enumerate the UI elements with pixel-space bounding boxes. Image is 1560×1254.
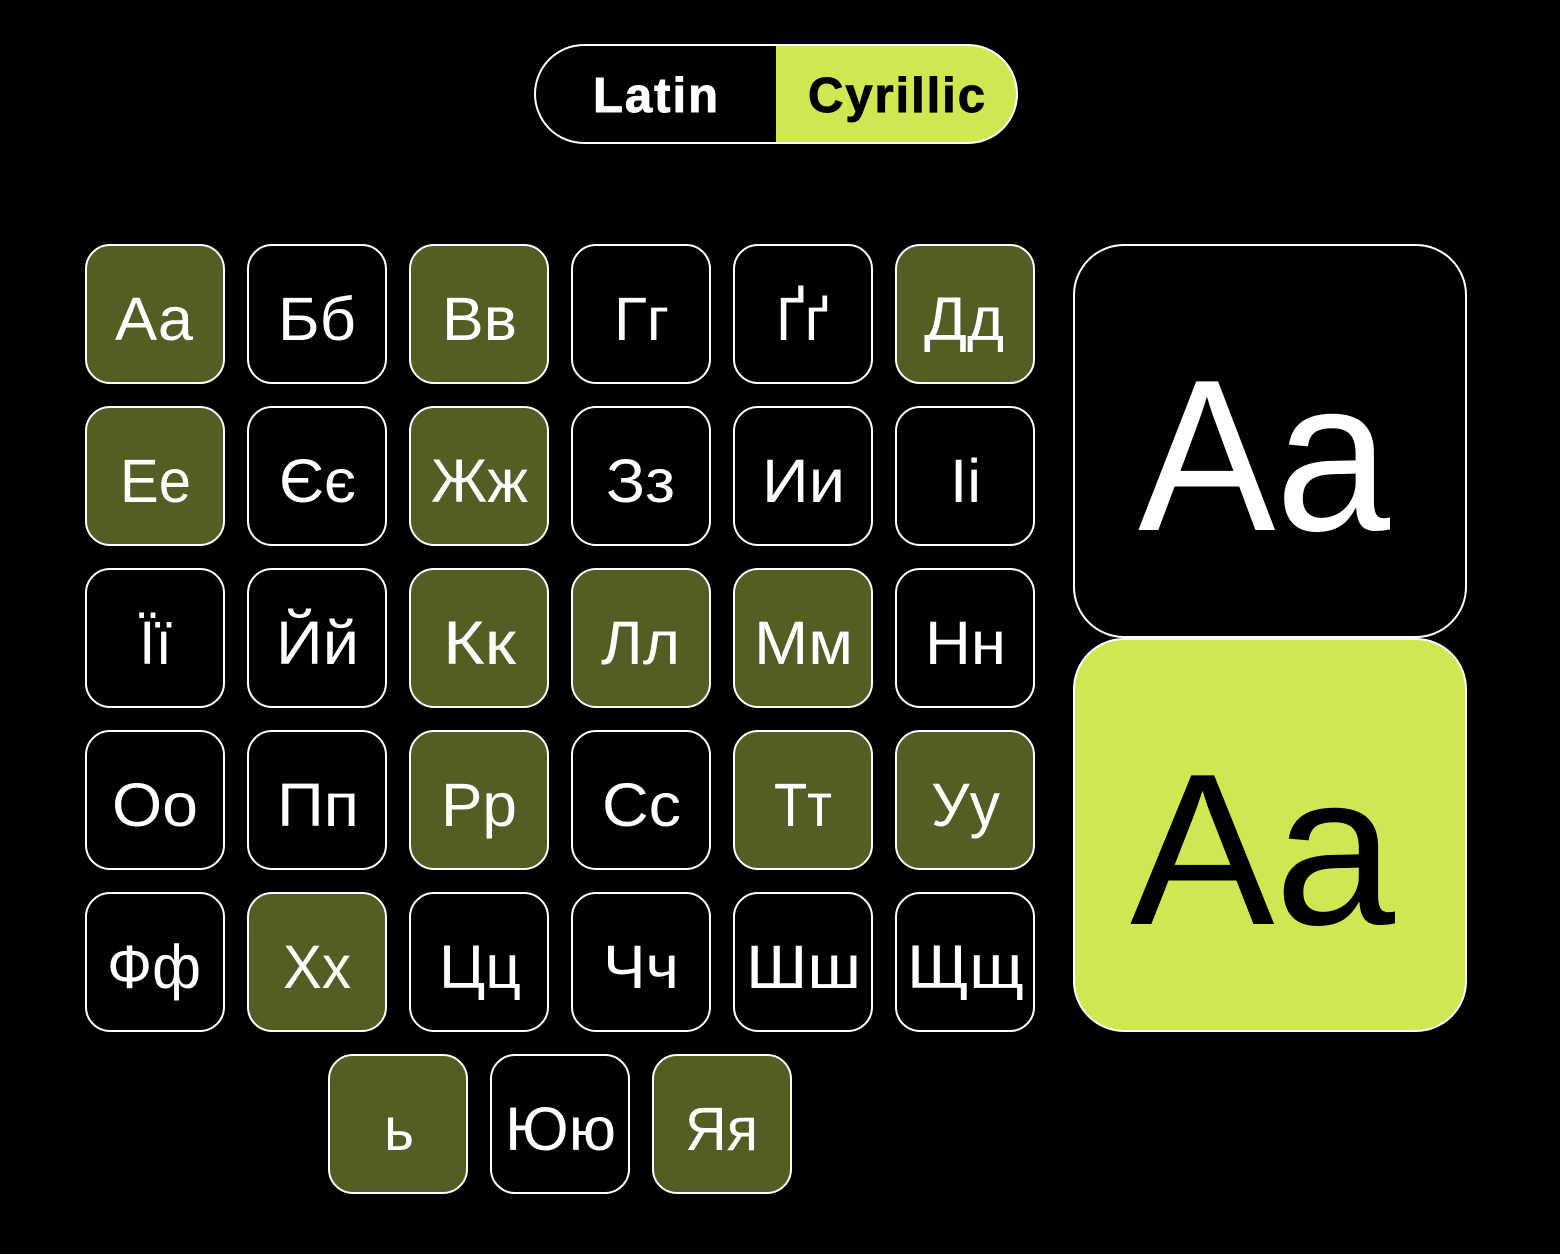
tile: Нн xyxy=(896,569,1034,707)
tile: Нн: Нн xyxy=(925,609,1006,677)
large specimen: black on lime xyxy=(1074,639,1466,1031)
tile: Сс: Сс xyxy=(602,771,681,839)
tile: Єє: Єє xyxy=(279,447,356,515)
glyph grid xyxy=(86,245,1034,1193)
tile: Вв xyxy=(410,245,548,383)
tile: Тт xyxy=(734,731,872,869)
tile: Жж: Жж xyxy=(431,447,528,515)
tile: Кк xyxy=(410,569,548,707)
tile: Юю: Юю xyxy=(505,1095,616,1163)
tile: Дд: Дд xyxy=(924,285,1004,353)
tile: Хх xyxy=(248,893,386,1031)
tile: Шш: Шш xyxy=(746,933,861,1001)
tile: Чч: Чч xyxy=(603,933,679,1001)
tile: Уу xyxy=(896,731,1034,869)
tile: Йй xyxy=(248,569,386,707)
tile: Юю xyxy=(491,1055,629,1193)
tile: Тт: Тт xyxy=(774,771,832,839)
large specimen: black on lime: Aa xyxy=(1130,728,1396,970)
tile: Хх: Хх xyxy=(283,933,351,1001)
tile: Цц xyxy=(410,893,548,1031)
tile: Оо: Оо xyxy=(112,771,198,839)
language toggle xyxy=(535,45,1017,143)
tile: Йй: Йй xyxy=(276,608,359,677)
tile: Бб xyxy=(248,245,386,383)
tile: Її xyxy=(86,569,224,707)
tile: Фф: Фф xyxy=(107,933,201,1001)
tile: Аа xyxy=(86,245,224,383)
tile: Фф xyxy=(86,893,224,1031)
tile: Мм xyxy=(734,569,872,707)
tile: Ее xyxy=(86,407,224,545)
tile: Ии xyxy=(734,407,872,545)
tile: Ии: Ии xyxy=(762,447,845,515)
tile: Оо xyxy=(86,731,224,869)
tile: ь xyxy=(329,1055,467,1193)
tile: Ґґ xyxy=(734,245,872,383)
toggle label: Latin: Latin xyxy=(593,69,718,123)
tile: Лл: Лл xyxy=(601,609,680,677)
tile: Гг: Гг xyxy=(614,285,669,353)
tile: Пп: Пп xyxy=(277,771,359,839)
large specimen: white on black xyxy=(1074,245,1466,637)
tile: Яя xyxy=(653,1055,791,1193)
tile: Іі: Іі xyxy=(950,447,981,515)
tile: Аа: Аа xyxy=(115,285,193,353)
tile: Сс xyxy=(572,731,710,869)
tile: Щщ xyxy=(896,893,1034,1031)
tile: Ее: Ее xyxy=(120,447,191,515)
tile: Гг xyxy=(572,245,710,383)
toggle: Cyrillic active segment xyxy=(776,45,1017,143)
toggle label: Cyrillic: Cyrillic xyxy=(808,69,985,123)
tile: Вв: Вв xyxy=(442,285,517,353)
tile: Жж xyxy=(410,407,548,545)
tile: Зз: Зз xyxy=(606,447,675,515)
tile: Яя: Яя xyxy=(685,1095,758,1163)
tile: Дд xyxy=(896,245,1034,383)
tile: Рр: Рр xyxy=(441,771,517,839)
tile: Кк: Кк xyxy=(443,609,516,677)
tile: Щщ: Щщ xyxy=(907,933,1024,1001)
tile: Ґґ: Ґґ xyxy=(776,285,829,353)
toggle outline xyxy=(535,45,1017,143)
tile: Єє xyxy=(248,407,386,545)
tile: Бб: Бб xyxy=(278,285,356,353)
tile: Рр xyxy=(410,731,548,869)
large specimen: white on black: Aa xyxy=(1138,334,1391,576)
tile: Шш xyxy=(734,893,872,1031)
tile: Цц: Цц xyxy=(439,933,521,1001)
tile: Чч xyxy=(572,893,710,1031)
tile: Мм: Мм xyxy=(754,609,853,677)
tile: Іі xyxy=(896,407,1034,545)
tile: Її: Її xyxy=(139,609,172,677)
tile: Зз xyxy=(572,407,710,545)
tile: ь: ь xyxy=(384,1095,414,1163)
tile: Пп xyxy=(248,731,386,869)
tile: Лл xyxy=(572,569,710,707)
tile: Уу: Уу xyxy=(931,771,1000,839)
